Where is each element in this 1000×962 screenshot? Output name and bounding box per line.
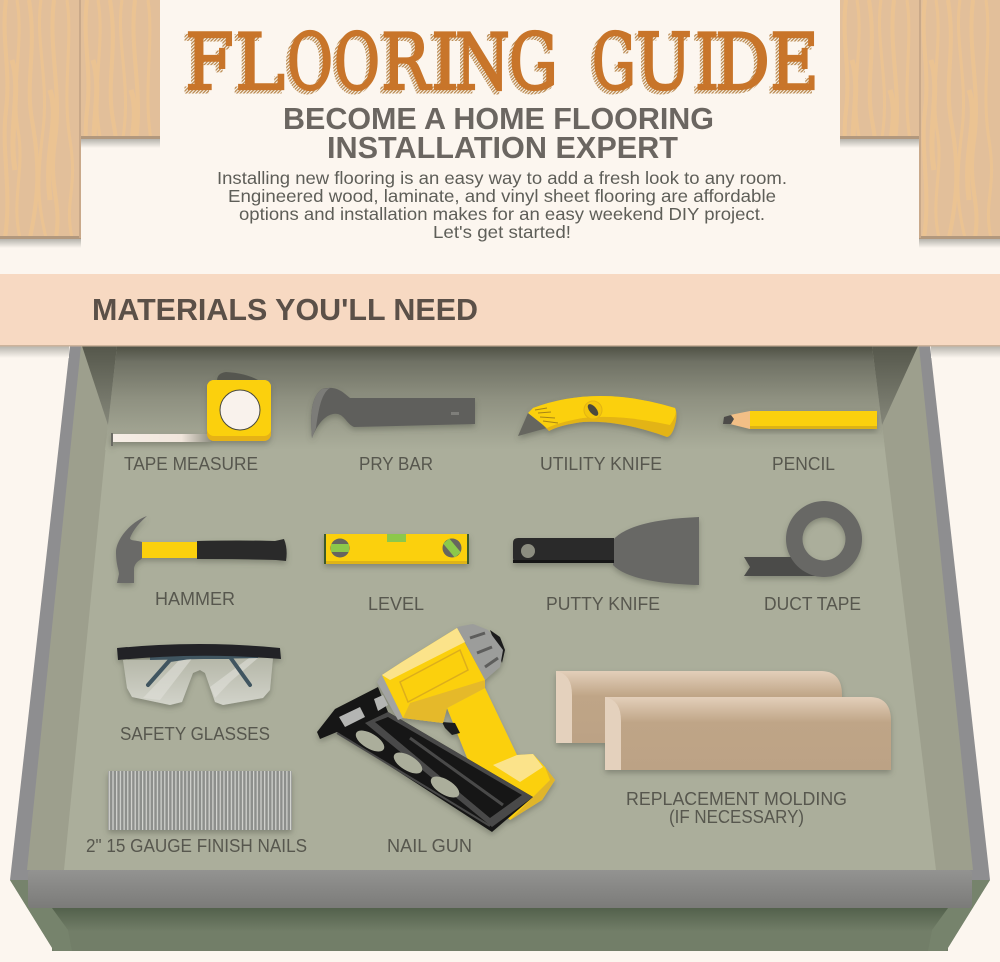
label: pry bar: PRY BAR (359, 454, 433, 474)
icon: finish nails (108, 771, 292, 830)
drawer corner shadow left (82, 346, 117, 425)
plank: far right (919, 0, 1000, 248)
drawer front lip (28, 870, 972, 908)
icon: pry bar (311, 388, 475, 438)
heading: materials: MATERIALS YOU'LL NEED (92, 292, 478, 327)
title: G (592, 18, 636, 108)
drawer outer rim (10, 346, 990, 880)
title: O (331, 21, 377, 111)
drawer underside (10, 880, 990, 951)
label: level: LEVEL (368, 594, 424, 614)
title: I (428, 21, 456, 111)
icon: utility knife (518, 396, 676, 437)
title: D (715, 18, 770, 108)
icon: duct tape (744, 501, 862, 577)
intro paragraph: Installing new flooring is an easy way to add a fresh look to any room. (217, 168, 787, 188)
icon: hammer (116, 516, 287, 583)
nail gun chuck (490, 630, 505, 663)
title (182, 18, 819, 111)
label: pencil: PENCIL (772, 454, 835, 474)
intro paragraph: Let's get started! (433, 222, 571, 242)
drawer (10, 346, 990, 951)
title: O (284, 21, 330, 111)
header band: materials (0, 274, 1000, 358)
intro paragraph: options and installation makes for an easy weekend DIY project. (239, 204, 765, 224)
label: duct tape: DUCT TAPE (764, 594, 861, 614)
title: I (431, 18, 459, 108)
title: G (509, 18, 558, 108)
label: tape measure: TAPE MEASURE (124, 454, 258, 474)
label: replacement molding (626, 789, 847, 827)
molding: back piece (556, 671, 842, 743)
title: L (232, 21, 282, 111)
title: G (506, 21, 555, 111)
title: N (452, 21, 507, 111)
molding: front piece (605, 697, 891, 770)
title: R (378, 21, 429, 111)
nail gun grip (447, 688, 555, 820)
label: replacement molding: (IF NECESSARY) (669, 807, 804, 827)
title: I (692, 21, 716, 111)
title: U (636, 18, 692, 108)
subtitle: INSTALLATION EXPERT (327, 130, 678, 165)
title: G (589, 21, 633, 111)
icon: pencil (723, 411, 877, 429)
title: E (770, 18, 819, 108)
icon: nail gun (317, 624, 555, 832)
label: finish nails: 2" 15 GAUGE FINISH NAILS (86, 836, 307, 856)
trigger (442, 722, 460, 735)
label: nail gun: NAIL GUN (387, 836, 472, 856)
title: O (287, 18, 333, 108)
drawer floor shadow at top (105, 346, 885, 450)
drawer inner walls (27, 346, 973, 870)
label: replacement molding: REPLACEMENT MOLDING (626, 789, 847, 809)
title: R (381, 18, 432, 108)
title: E (767, 21, 816, 111)
label: putty knife: PUTTY KNIFE (546, 594, 660, 614)
icon: tape measure (111, 372, 271, 446)
title: F (185, 18, 234, 108)
intro paragraph (217, 168, 787, 242)
subtitle (283, 101, 714, 165)
subtitle: BECOME A HOME FLOORING (283, 101, 714, 136)
icon: safety glasses (117, 644, 281, 705)
title: D (712, 21, 767, 111)
label: safety glasses: SAFETY GLASSES (120, 724, 270, 744)
drawer floor (64, 346, 936, 870)
intro paragraph: Engineered wood, laminate, and vinyl sheet flooring are affordable (228, 186, 776, 206)
icon: replacement molding (556, 671, 891, 770)
label: utility knife: UTILITY KNIFE (540, 454, 662, 474)
title: N (455, 18, 510, 108)
title: U (633, 21, 689, 111)
title: I (695, 18, 719, 108)
icon: putty knife (513, 517, 699, 585)
title: O (334, 18, 380, 108)
plank: inner right (840, 0, 919, 238)
plank: inner left (81, 0, 160, 238)
nail gun head (377, 675, 403, 720)
drawer corner shadow right (872, 346, 918, 425)
title: F (182, 21, 231, 111)
icon: level (324, 534, 469, 564)
title: L (235, 18, 285, 108)
label: hammer: HAMMER (155, 589, 235, 609)
plank: far left (0, 0, 81, 248)
magazine (317, 687, 533, 832)
